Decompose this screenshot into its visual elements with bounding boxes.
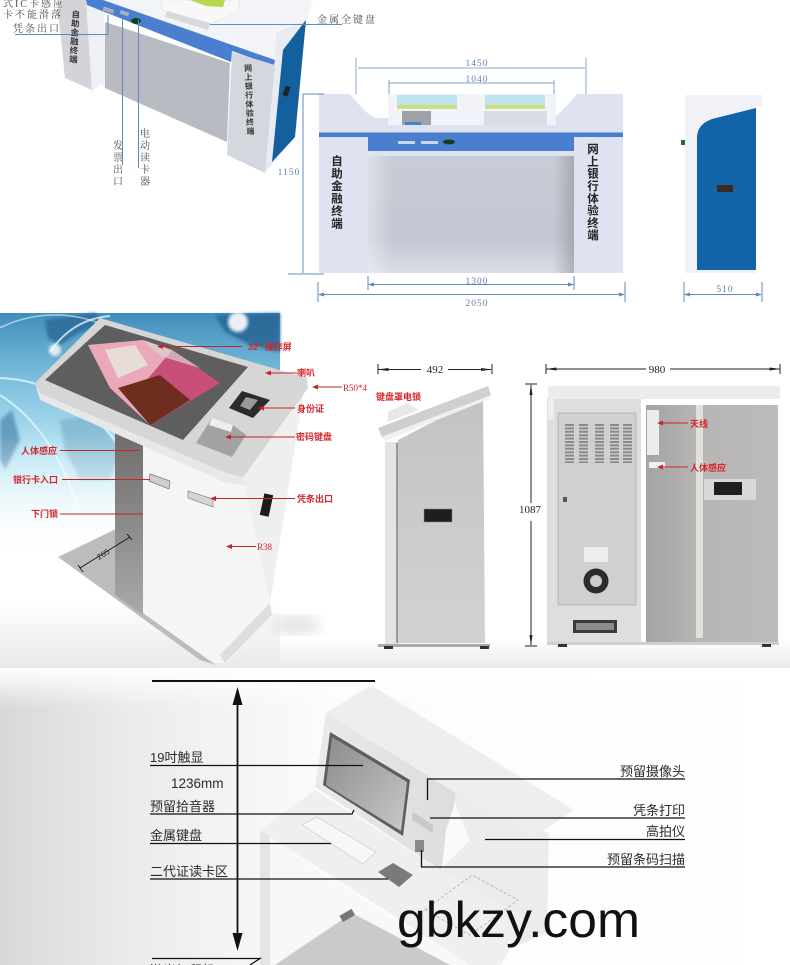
callout: reserved barcode scanner: 预留条码扫描 xyxy=(607,852,685,867)
dimension: 1087 xyxy=(519,384,542,646)
floor shadow xyxy=(269,616,321,634)
pink interface image xyxy=(88,340,220,425)
callout: reserved camera: 预留摄像头 xyxy=(620,764,685,779)
callout: receipt outlet xyxy=(215,493,333,504)
label: right terminal name: 网上银行体验终端 xyxy=(244,64,255,136)
panel: desktop terminal xyxy=(260,685,574,965)
callout: R38 xyxy=(231,542,273,552)
panel: right floor reflection xyxy=(280,640,790,670)
callout: electric card reader: 电动读卡器 xyxy=(138,127,150,188)
handle xyxy=(704,479,756,500)
scan area mark xyxy=(425,875,518,935)
dimension: 980 xyxy=(546,364,780,376)
label: 网上银行体验终端: 网上银行体验终端 xyxy=(586,143,599,241)
dimension: overall height 1236mm xyxy=(152,681,375,951)
panel: kiosk back view xyxy=(547,386,780,647)
callout: rear body sensor xyxy=(662,462,726,473)
display cut-out xyxy=(388,94,556,125)
callout: antenna: 天线 xyxy=(690,418,708,429)
sensor xyxy=(649,462,665,468)
dimension 265: 265 xyxy=(95,547,112,562)
table top xyxy=(35,318,308,477)
top back panel xyxy=(326,685,574,837)
desk leg xyxy=(260,830,270,965)
blue band xyxy=(319,132,623,151)
printer slot xyxy=(412,812,433,833)
stainless base xyxy=(58,528,216,665)
callout: R38: R38 xyxy=(257,542,273,552)
callout: R50*4: R50*4 xyxy=(343,383,368,393)
callout: R50*4 xyxy=(317,383,368,393)
callout: ID card: 身份证 xyxy=(297,403,324,414)
lock xyxy=(563,497,567,502)
dimension: 510 xyxy=(684,282,762,302)
panel: globe background xyxy=(0,312,280,613)
dimension: 1300: 1300 xyxy=(466,277,488,287)
panel: side elevation xyxy=(681,95,763,273)
receipt slot xyxy=(188,491,213,507)
label: 自助金融终端: 自助金融终端 xyxy=(330,154,343,230)
left door xyxy=(547,398,641,642)
antenna xyxy=(647,410,659,455)
dimension: 1450 xyxy=(356,58,586,94)
screen left xyxy=(397,95,457,125)
callout: speaker xyxy=(270,367,315,378)
callout: rear body sensor: 人体感应 xyxy=(690,462,726,473)
dimension: 492: 492 xyxy=(427,364,443,376)
callout: lower door lock: 下门锁 xyxy=(31,508,58,519)
high-speed camera opening xyxy=(442,803,470,868)
panel: front elevation xyxy=(319,94,623,273)
right stainless xyxy=(646,405,778,643)
dimension: 1150: 1150 xyxy=(278,168,300,178)
callout: receipt outlet and card labels: 卡不能滑落 xyxy=(3,8,63,21)
callout: 32 inch screen: 32" 操作屏 xyxy=(248,341,292,352)
card slot xyxy=(149,474,170,489)
keyboard xyxy=(302,817,376,864)
PIN pad xyxy=(196,418,246,457)
front face xyxy=(315,713,456,870)
world map landmasses xyxy=(0,313,280,480)
callout: laser printer xyxy=(150,958,260,965)
barcode scanner xyxy=(415,840,424,852)
callout: antenna xyxy=(662,418,708,429)
screen right xyxy=(484,95,547,125)
panel: lower section background xyxy=(0,668,790,965)
side panel xyxy=(441,793,549,965)
callout: 19 inch touch display: 19吋触显 xyxy=(150,750,203,765)
connector plate xyxy=(573,620,617,633)
column xyxy=(115,433,143,615)
callout: reserved microphone xyxy=(150,799,354,814)
callout: PIN keyboard xyxy=(230,431,332,442)
dimension: overall height 1236mm: 1236mm xyxy=(171,776,224,791)
callout: receipt printing: 凭条打印 xyxy=(633,803,685,818)
panel: isometric terminal xyxy=(57,0,313,173)
ID card reader xyxy=(229,391,270,418)
desk xyxy=(260,790,530,965)
panel: left floor shadow xyxy=(0,600,280,670)
callout: document camera: 高拍仪 xyxy=(646,824,685,839)
dimension: 1450: 1450 xyxy=(466,59,488,69)
callout: metal full keyboard: 金属全键盘 xyxy=(317,13,377,26)
callout: receipt outlet: 凭条出口 xyxy=(297,493,333,504)
base edge xyxy=(220,603,272,663)
callout: lower door lock xyxy=(31,508,143,519)
fan xyxy=(584,568,608,594)
callout: ID card xyxy=(263,403,324,414)
screen xyxy=(323,732,410,836)
callout: reserved microphone: 预留拾音器 xyxy=(150,799,215,814)
callout: PIN keyboard: 密码键盘 xyxy=(296,431,332,442)
top slab xyxy=(548,386,780,399)
dimension: 1040: 1040 xyxy=(466,75,488,85)
dimension: 510: 510 xyxy=(716,285,734,295)
dimension 265 xyxy=(78,534,132,572)
front body xyxy=(319,94,623,273)
spec label xyxy=(584,547,608,562)
callout: body sensor xyxy=(21,445,140,456)
dimension: 1150 xyxy=(278,94,324,274)
body front xyxy=(143,446,272,663)
grey recess xyxy=(368,156,574,273)
dimension: 1040 xyxy=(389,75,554,94)
callout: ID card reader zone: 二代证读卡区 xyxy=(150,864,228,879)
dimension: 1300 xyxy=(368,276,574,290)
lower inner shade xyxy=(275,913,450,965)
panel: kiosk side view xyxy=(378,386,491,649)
watermark: gbkzy.com: gbkzy.com xyxy=(397,892,640,948)
dimension: 2050 xyxy=(318,282,625,309)
callout: bank card slot xyxy=(13,474,150,485)
dimension: 2050: 2050 xyxy=(466,299,488,309)
band controls xyxy=(398,140,455,144)
callout: body sensor: 人体感应 xyxy=(21,445,57,456)
ID card pad xyxy=(378,863,413,887)
touch screen xyxy=(45,325,248,440)
base xyxy=(547,642,779,645)
callout: bank card slot: 银行卡入口 xyxy=(13,474,58,485)
vents xyxy=(570,424,628,463)
callout: reserved camera xyxy=(428,764,685,800)
callout: reserved barcode scanner xyxy=(422,850,685,867)
dimension: 1087: 1087 xyxy=(519,504,542,516)
callout: invoice outlet: 发票出口 xyxy=(110,139,122,188)
callout: receipt outlet and card labels xyxy=(3,0,108,35)
dimension: 980: 980 xyxy=(649,364,666,376)
callout: 32 inch screen xyxy=(162,341,292,352)
callout: receipt outlet and card labels: 凭条出口 xyxy=(13,22,61,35)
callout: metal keyboard: 金属键盘 xyxy=(150,828,202,843)
label: left terminal name: 自助金融终端 xyxy=(68,9,81,65)
panel: touchscreen kiosk xyxy=(35,318,321,665)
dimension: 492 xyxy=(378,364,492,376)
body side xyxy=(243,392,304,603)
callout: speaker: 喇叭 xyxy=(297,367,315,378)
inner panel xyxy=(558,413,636,605)
callout: keyboard cover lock: 键盘罩电锁 xyxy=(376,391,421,402)
